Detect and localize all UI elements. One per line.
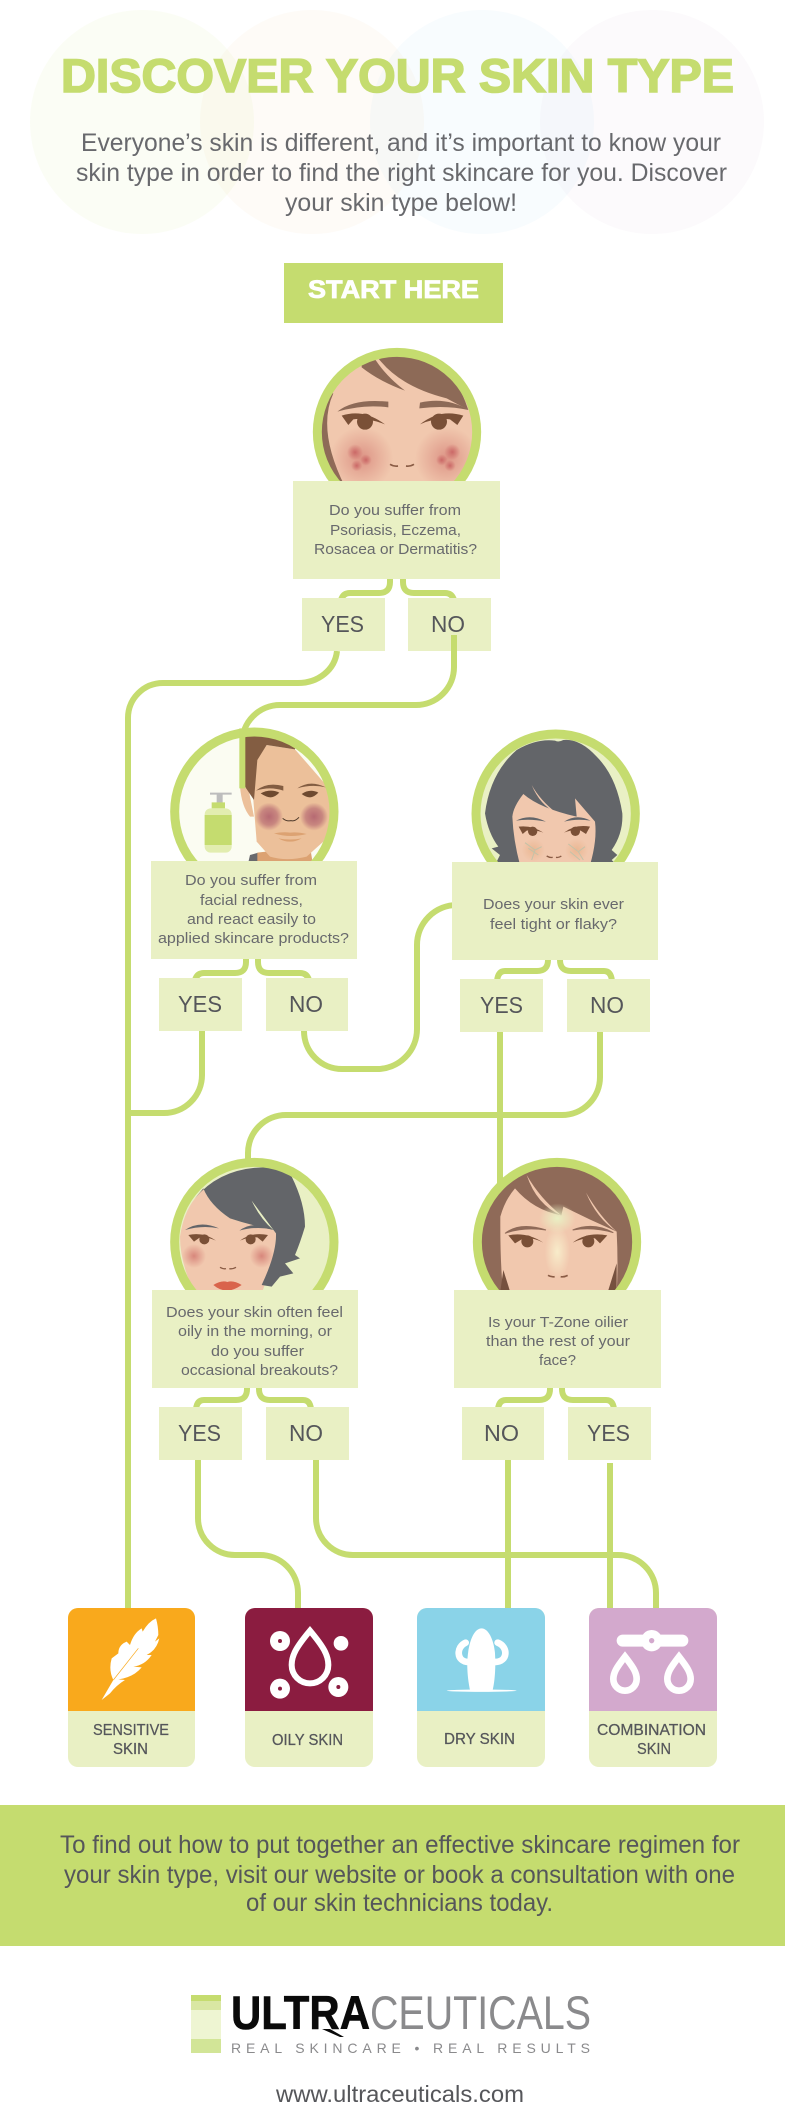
portrait: red cheeks — [312, 348, 482, 481]
icon: cactus — [447, 1628, 517, 1692]
card: combination skin: COMBINATION — [597, 1722, 706, 1739]
question 5: oily t-zone — [454, 1160, 661, 1388]
question 3: tight or flaky: Does your skin ever — [483, 896, 624, 913]
answers for question 1 — [302, 598, 491, 651]
question 4: oily in the morning: do you suffer — [211, 1343, 304, 1360]
question 1: skin conditions: Do you suffer from — [329, 502, 461, 519]
background circles — [30, 10, 764, 234]
answers for question 4: NO — [289, 1420, 323, 1446]
answers for question 1: NO — [431, 611, 465, 637]
logo: ultraceuticals: REAL SKINCARE • REAL RESULTS — [231, 2040, 590, 2056]
intro text — [76, 129, 727, 217]
answers for question 2: NO — [289, 991, 323, 1017]
card: dry skin: DRY SKIN — [444, 1731, 515, 1748]
icon: balance scale with drops — [613, 1630, 691, 1691]
card: sensitive skin: SKIN — [113, 1741, 148, 1758]
question 2: facial redness: facial redness, — [200, 892, 303, 909]
answers for question 3: NO — [590, 992, 624, 1018]
question 4: oily in the morning — [152, 1162, 358, 1388]
portrait: shiny t-zone — [472, 1158, 642, 1290]
card: oily skin: OILY SKIN — [272, 1732, 343, 1749]
card: sensitive skin: SENSITIVE — [93, 1722, 169, 1739]
question 5: oily t-zone: Is your T-Zone oilier — [488, 1314, 628, 1331]
footer call to action: your skin type, visit our website or book a consultation with one — [64, 1861, 735, 1889]
answers for question 4: YES — [178, 1420, 221, 1446]
start here button — [284, 263, 503, 323]
icon: feather — [102, 1618, 159, 1700]
footer call to action — [0, 1805, 785, 1946]
footer call to action: of our skin technicians today. — [246, 1889, 553, 1917]
question 4: oily in the morning: oily in the morning, or — [178, 1323, 332, 1340]
answers for question 5: NO — [484, 1420, 519, 1446]
question 2: facial redness: applied skincare products? — [158, 930, 349, 947]
answers for question 5 — [462, 1407, 651, 1460]
question 2: facial redness: and react easily to — [187, 911, 316, 928]
title: DISCOVER YOUR SKIN TYPE — [61, 49, 734, 102]
intro text: your skin type below! — [285, 189, 517, 217]
question 3: tight or flaky: feel tight or flaky? — [490, 916, 617, 933]
question 1: skin conditions: Rosacea or Dermatitis? — [314, 541, 477, 558]
card: oily skin — [245, 1608, 373, 1767]
start here button: START HERE — [308, 276, 479, 304]
website url: www.ultraceuticals.com — [275, 2081, 524, 2107]
question 2: facial redness — [151, 728, 357, 959]
intro text: Everyone’s skin is different, and it’s important to know your — [81, 129, 721, 157]
flow connectors — [128, 578, 656, 1608]
answers for question 4 — [159, 1407, 349, 1460]
question 4: oily in the morning: Does your skin often feel — [166, 1304, 343, 1321]
card: combination skin: SKIN — [637, 1741, 671, 1758]
question 4: oily in the morning: occasional breakouts? — [181, 1362, 338, 1379]
logo: ultraceuticals: ULTRA — [231, 1986, 370, 2039]
question 3: tight or flaky — [452, 734, 658, 960]
question 1: skin conditions: Psoriasis, Eczema, — [330, 522, 461, 539]
question 1: skin conditions — [293, 350, 500, 579]
intro text: skin type in order to find the right skincare for you. Discover — [76, 159, 727, 187]
question 5: oily t-zone: face? — [539, 1352, 576, 1369]
icon: oil drop and pores — [270, 1631, 348, 1699]
answers for question 2: YES — [178, 991, 222, 1017]
portrait: breakouts — [170, 1158, 338, 1290]
card: dry skin — [417, 1608, 545, 1767]
logo: ultraceuticals — [191, 1986, 591, 2056]
answers for question 3 — [460, 979, 650, 1032]
footer call to action: To find out how to put together an effective skincare regimen for — [60, 1831, 740, 1859]
answers for question 2 — [159, 978, 348, 1031]
answers for question 3: YES — [480, 992, 523, 1018]
answers for question 5: YES — [587, 1420, 630, 1446]
card: combination skin — [589, 1608, 717, 1767]
logo: ultraceuticals: CEUTICALS — [370, 1986, 591, 2039]
card: sensitive skin — [68, 1608, 195, 1767]
question 2: facial redness: Do you suffer from — [185, 872, 317, 889]
portrait: man with product bottle — [170, 728, 338, 861]
question 5: oily t-zone: than the rest of your — [486, 1333, 630, 1350]
portrait: dry flaky cheeks — [472, 730, 640, 862]
answers for question 1: YES — [321, 611, 364, 637]
